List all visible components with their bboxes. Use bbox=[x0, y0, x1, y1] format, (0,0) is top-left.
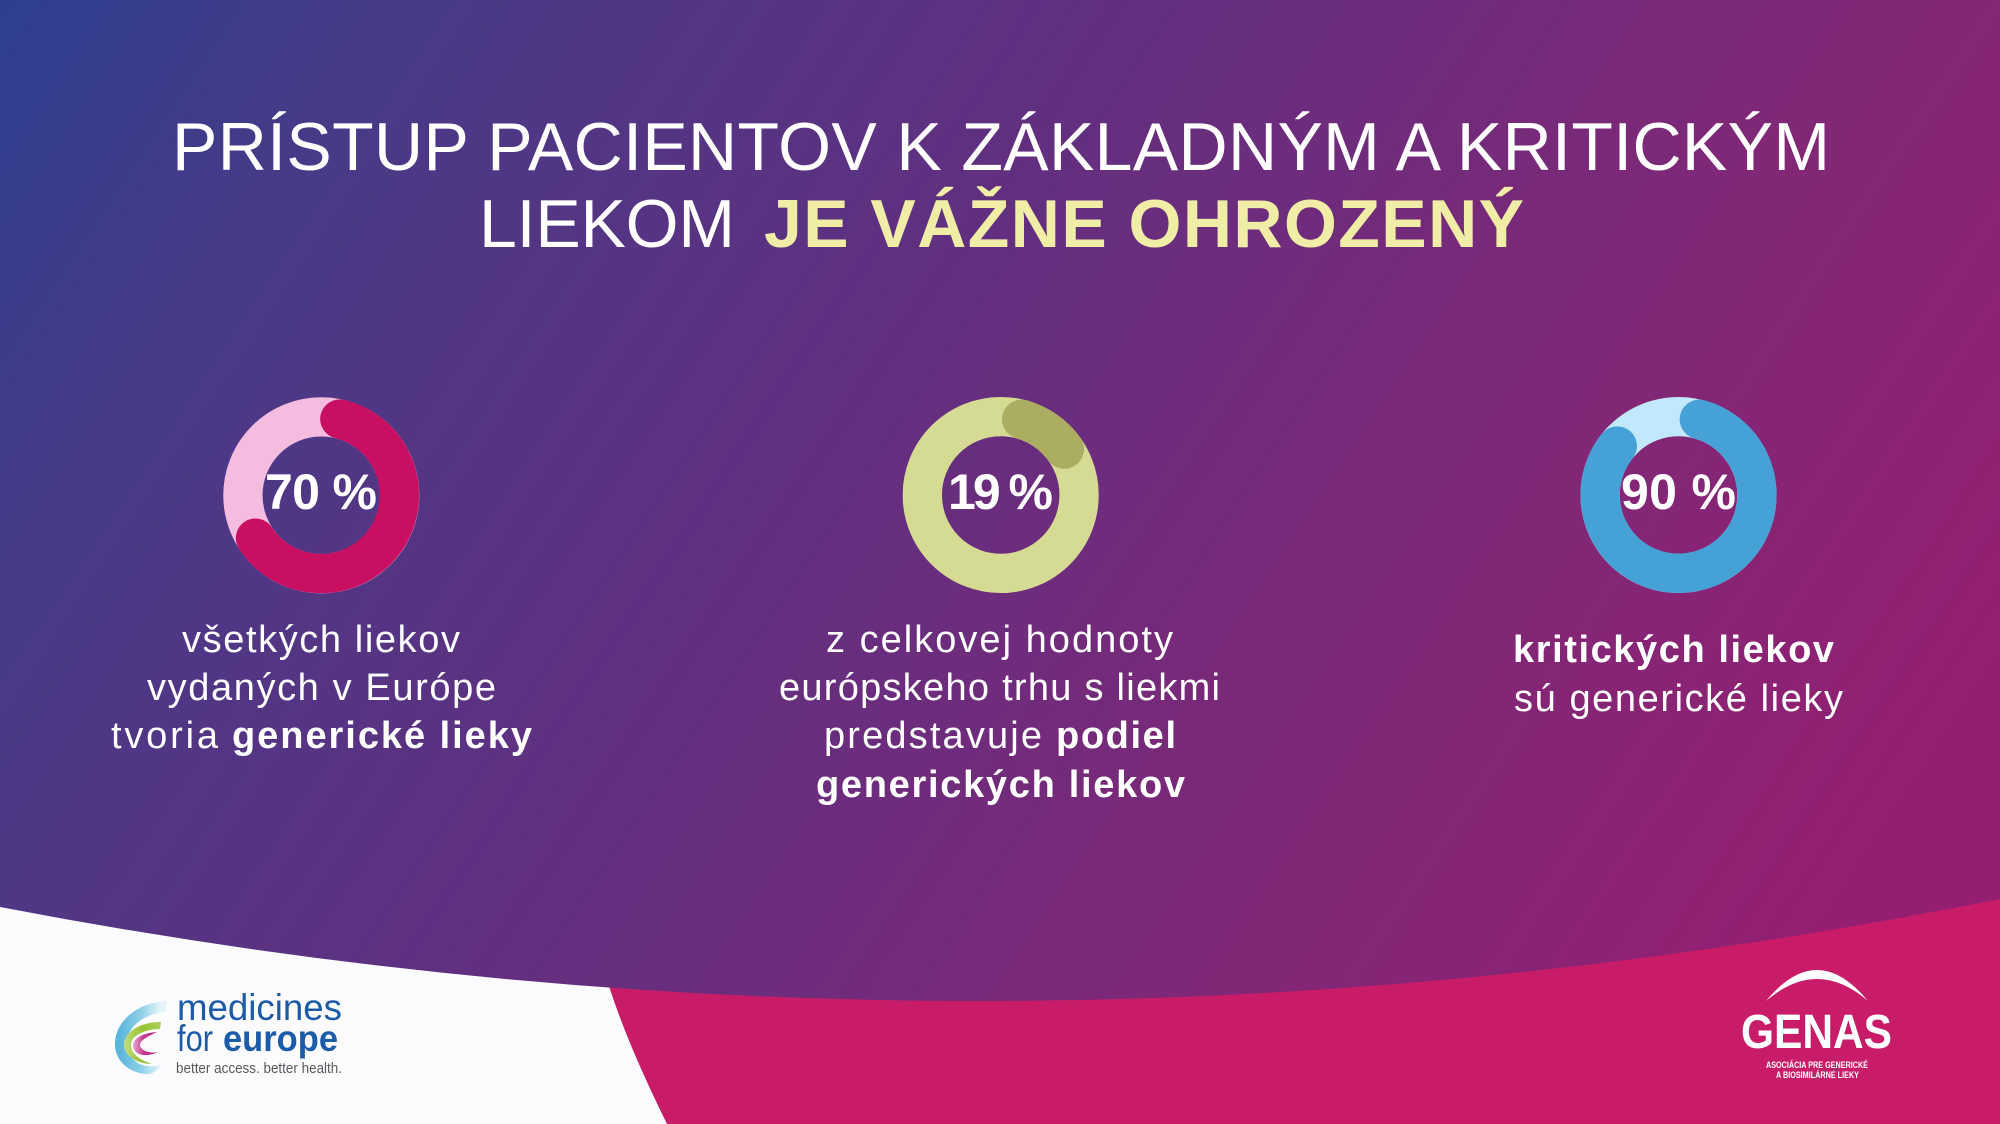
text block: 70 % description: vydaných v Európe bbox=[147, 667, 496, 709]
logo wordmark: ASOCIÁCIA PRE GENERICKÉ bbox=[1766, 1060, 1868, 1070]
text block: 19 % description: predstavuje bbox=[824, 715, 1042, 757]
panel: magenta footer shape bbox=[600, 880, 2000, 1124]
title: PRÍSTUP PACIENTOV K ZÁKLADNÝM A KRITICKÝM bbox=[172, 109, 1830, 185]
donut chart: 90 % bbox=[1600, 417, 1757, 573]
text block: 19 % description: z celkovej hodnoty bbox=[826, 619, 1173, 661]
logo wordmark: GENAS bbox=[1741, 1006, 1892, 1059]
panel: white footer background bbox=[0, 880, 2000, 1124]
icon: white arc bbox=[1766, 970, 1868, 1001]
logo: Medicines for Europe bbox=[115, 987, 342, 1077]
logo wordmark bbox=[1741, 1006, 1892, 1080]
logo wordmark bbox=[176, 987, 342, 1077]
panel: 19 % statistic bbox=[779, 417, 1220, 806]
value: 19 %: 19 % bbox=[948, 464, 1053, 520]
text block: 19 % description: podiel bbox=[1056, 715, 1176, 757]
panel: 70 % statistic bbox=[111, 417, 532, 757]
icon: crescent mark bbox=[115, 1001, 166, 1074]
donut chart: 19 % bbox=[922, 417, 1079, 573]
text block: 19 % description: generických liekov bbox=[816, 764, 1185, 806]
text block: 90 % description: kritických liekov bbox=[1513, 629, 1834, 671]
text block: 70 % description: generické lieky bbox=[232, 715, 532, 757]
value: 70 %: 70 % bbox=[265, 464, 377, 520]
value: 90 %: 90 % bbox=[1621, 464, 1736, 520]
text block: 70 % description: tvoria bbox=[111, 715, 219, 757]
title bbox=[172, 109, 1830, 262]
logo wordmark: A BIOSIMILÁRNE LIEKY bbox=[1776, 1070, 1859, 1080]
text block: 90 % description: sú generické lieky bbox=[1514, 678, 1843, 720]
title: LIEKOM bbox=[479, 186, 735, 262]
logo wordmark: for bbox=[177, 1018, 213, 1059]
text block: 70 % description bbox=[111, 619, 532, 757]
title: JE VÁŽNE OHROZENÝ bbox=[764, 185, 1524, 262]
text block: 70 % description: všetkých liekov bbox=[182, 619, 460, 661]
text block: 90 % description bbox=[1513, 629, 1843, 720]
text block: 19 % description: európskeho trhu s liekmi bbox=[779, 667, 1220, 709]
logo wordmark: better access. better health. bbox=[176, 1060, 342, 1077]
logo: GENAS bbox=[1741, 970, 1892, 1080]
donut chart: 70 % bbox=[243, 417, 400, 574]
text block: 19 % description bbox=[779, 619, 1220, 806]
logo wordmark: medicines bbox=[177, 987, 342, 1028]
logo wordmark: europe bbox=[223, 1018, 338, 1059]
panel: 90 % statistic bbox=[1513, 417, 1843, 720]
